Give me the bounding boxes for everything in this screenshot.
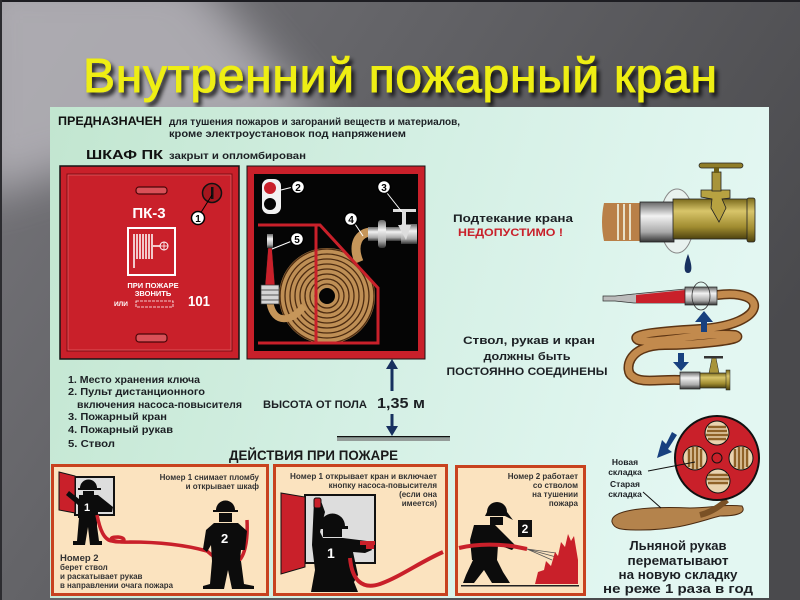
icon: leaking valve: [602, 163, 755, 273]
water spray: [527, 549, 556, 560]
heading: purpose: закрыт и опломбирован: [169, 150, 306, 162]
panel: action 3: [456, 466, 584, 594]
legend list: 5. Ствол: [68, 439, 115, 450]
nozzle: [603, 282, 717, 310]
marker 3: [378, 180, 402, 212]
firefighter 2: [203, 500, 254, 589]
icon: connected nozzle, hose and valve: [603, 282, 754, 390]
label: cabinet code: ПК-3: [132, 205, 166, 222]
text: number 1: имеется): [402, 499, 437, 508]
hose: [350, 552, 443, 586]
marker 1: 1: [195, 214, 201, 225]
legend list: 1. Место хранения ключа: [68, 375, 200, 386]
text: number 1: [160, 473, 260, 491]
text: permanent connection: должны быть: [484, 351, 571, 363]
firefighter 2: [463, 502, 516, 583]
arrow: down: [386, 414, 398, 436]
labels: folds: Старая: [610, 479, 640, 489]
marker 4: [344, 212, 363, 236]
text: permanent connection: [446, 335, 608, 378]
marker 1: [192, 195, 212, 225]
marker 2: 2: [295, 183, 301, 194]
pointer lines: [643, 462, 695, 508]
text: leak warning: [453, 213, 574, 239]
text: fire call instruction: [114, 281, 210, 310]
cabinet: [281, 493, 375, 574]
icon: remote pump button: [262, 179, 281, 214]
icon: hose reel sign: [128, 228, 175, 275]
arrow: down: [673, 353, 689, 371]
labels: folds: [608, 457, 642, 499]
marker 5: [272, 232, 304, 249]
legend list: [68, 375, 242, 450]
text: fire call instruction: ПРИ ПОЖАРЕ: [127, 281, 179, 290]
text: number 2: пожара: [549, 499, 579, 508]
text: leak warning: Подтекание крана: [453, 213, 574, 225]
floor line: [337, 436, 450, 441]
hose and nozzle: [459, 545, 527, 549]
panel: action 1: [52, 466, 268, 594]
small valve: [680, 356, 730, 390]
pump button: [314, 498, 321, 508]
text: leak warning: НЕДОПУСТИМО !: [458, 227, 563, 239]
heading: purpose: ПРЕДНАЗНАЧЕН: [58, 116, 162, 128]
text: number 1: Номер 1 снимает пломбу: [160, 473, 260, 482]
hose on floor: [97, 515, 247, 563]
text: permanent connection: ПОСТОЯННО СОЕДИНЕНЫ: [446, 366, 608, 378]
labels: folds: Новая: [612, 457, 638, 467]
heading: purpose: ШКАФ ПК: [86, 147, 163, 162]
labels: folds: складка: [608, 489, 642, 499]
firefighter 1: [66, 480, 113, 545]
panel: action 2: [274, 466, 446, 594]
legend list: включения насоса-повысителя: [77, 400, 242, 411]
text: hose refold rule: перематывают: [628, 554, 728, 568]
icon: flames: [535, 534, 578, 584]
text: number 2: на тушении: [532, 490, 578, 499]
ground line: [461, 585, 579, 586]
text: number 2: и раскатывает рукав: [60, 572, 143, 581]
firefighter 1: 1: [84, 502, 90, 514]
icon: valve: [368, 209, 417, 248]
firefighter 1: [311, 501, 372, 592]
marker 5: 5: [294, 235, 300, 246]
text: hose refold rule: Льняной рукав: [630, 539, 727, 553]
heading: purpose: [58, 116, 460, 162]
text: number 2: со стволом: [533, 481, 578, 490]
legend list: 2. Пульт дистанционного: [68, 387, 205, 398]
valve: [360, 543, 375, 547]
arrow: up: [695, 311, 713, 332]
text: permanent connection: Ствол, рукав и кран: [463, 335, 595, 347]
height dimension: [263, 359, 450, 441]
panel: open cabinet: [247, 166, 425, 359]
text: number 1: и открывает шкаф: [186, 482, 259, 491]
marker 4: 4: [348, 215, 354, 226]
hose coil: [280, 249, 374, 343]
text: number 1: Номер 1 открывает кран и включает: [290, 472, 437, 481]
hose to valve: [356, 232, 372, 262]
number tag 2: 2: [522, 522, 529, 536]
hose to nozzle: [270, 303, 304, 319]
label: height from floor: [263, 396, 425, 412]
legend list: 4. Пожарный рукав: [68, 425, 173, 436]
text: number 2: в направлении очага пожара: [60, 581, 174, 590]
label: height from floor: ВЫСОТА ОТ ПОЛА: [263, 399, 367, 411]
text: number 2: [508, 472, 579, 508]
text: hose refold rule: на новую складку: [618, 568, 738, 582]
text: hose refold rule: [603, 539, 753, 596]
text: number 2: [60, 553, 174, 590]
icon: top handle: [136, 187, 167, 194]
panel: closed cabinet: [60, 166, 239, 359]
water drop: [685, 254, 691, 273]
label: height from floor: 1,35 м: [377, 396, 425, 412]
text: fire call instruction: ЗВОНИТЬ: [135, 289, 172, 298]
text: hose refold rule: не реже 1 раза в год: [603, 582, 753, 596]
heading: purpose: для тушения пожаров и загораний веществ и материалов,: [169, 117, 460, 128]
cabinet: [59, 472, 114, 515]
frame bracket: [258, 225, 378, 343]
icon: nozzle: [261, 234, 279, 304]
poster panel: [50, 107, 769, 598]
text: number 1: [290, 472, 438, 508]
icon: key lock: [202, 184, 222, 202]
text: number 1: кнопку насоса-повысителя: [329, 481, 437, 490]
labels: folds: складка: [608, 467, 642, 477]
legend list: 3. Пожарный кран: [68, 412, 167, 423]
arrow: up: [386, 359, 398, 391]
heading: purpose: кроме электроустановок под напряжением: [169, 129, 406, 140]
text: number 2: берет ствол: [60, 563, 108, 572]
firefighter 2: 2: [221, 531, 228, 546]
firefighter 1: 1: [327, 545, 335, 561]
icon: bottom handle: [136, 334, 167, 342]
icon: hose reel: [608, 416, 759, 530]
marker 3: 3: [381, 183, 387, 194]
text: number 2: Номер 2 работает: [508, 472, 578, 481]
title: Внутренний пожарный кран: [83, 50, 717, 103]
text: fire call instruction: 101: [188, 293, 210, 310]
text: fire call instruction: ИЛИ: [114, 301, 128, 308]
marker 2: [281, 180, 304, 194]
text: number 1: (если она: [399, 490, 438, 499]
heading: actions: ДЕЙСТВИЯ ПРИ ПОЖАРЕ: [229, 446, 398, 463]
arrow: rotate: [657, 432, 677, 458]
text: number 2: Номер 2: [60, 553, 99, 564]
